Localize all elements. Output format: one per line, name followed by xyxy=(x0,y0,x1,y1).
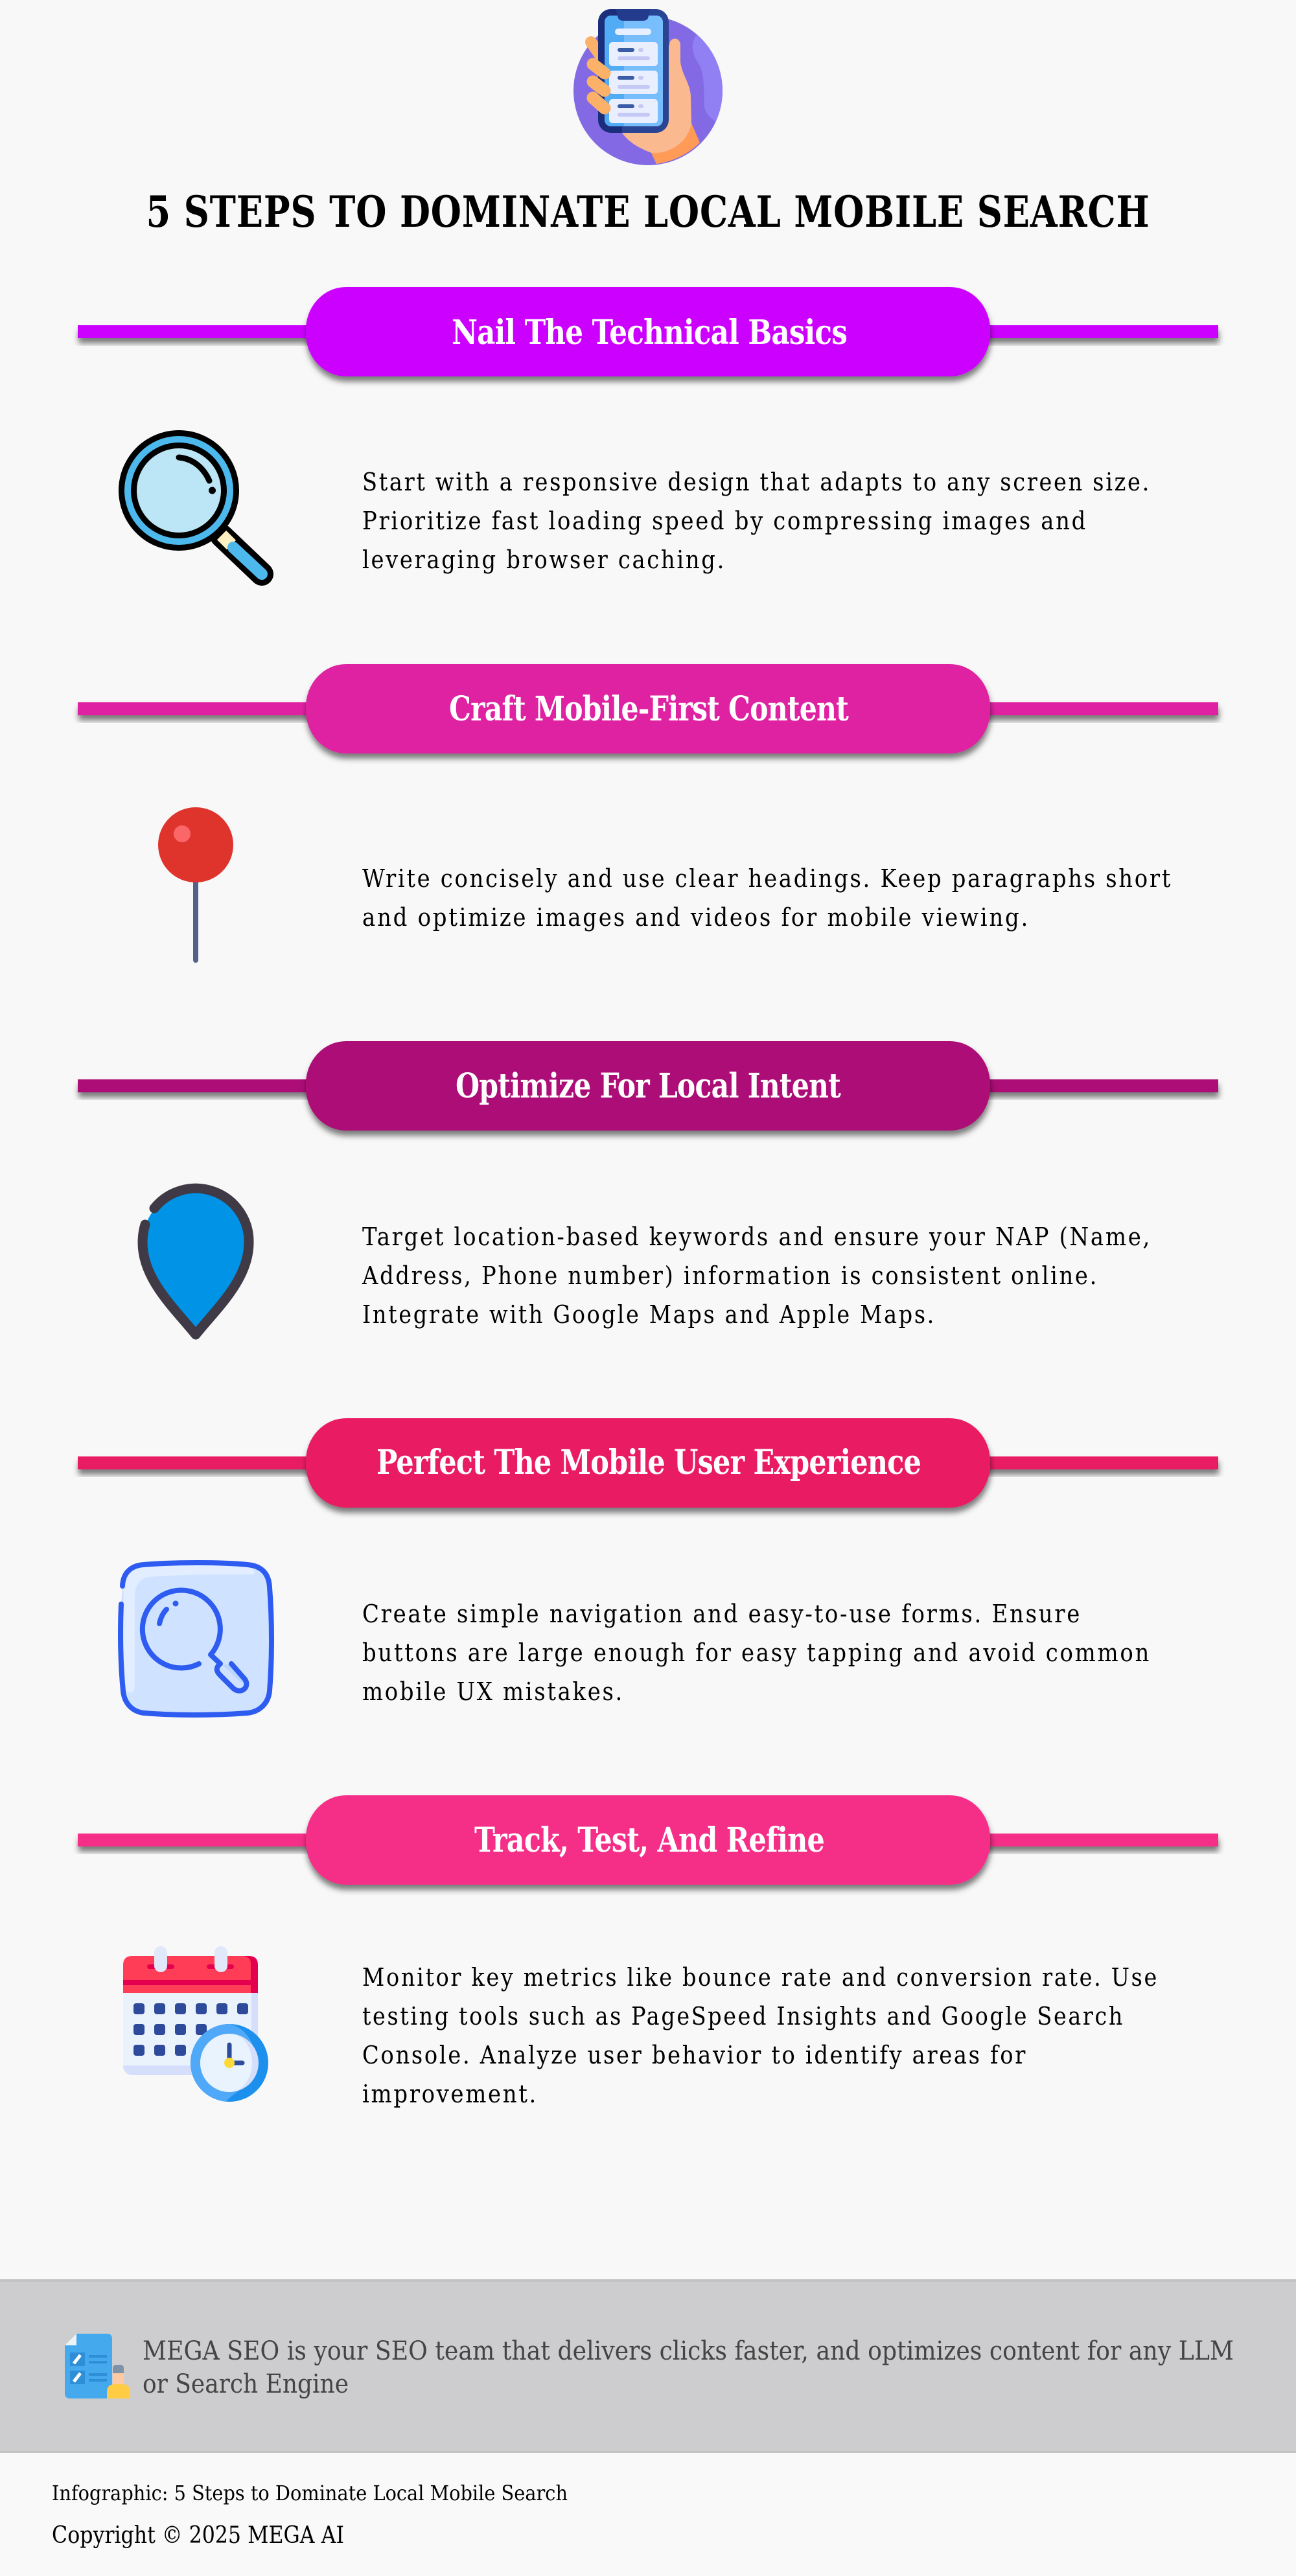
banner: Craft Mobile-First Content: Craft Mobile-First Content xyxy=(449,689,849,729)
text: step 3 description: Address, Phone number) information is consistent online. xyxy=(362,1261,1098,1290)
footer xyxy=(0,2453,1296,2576)
text: step 5 description xyxy=(362,1963,1159,2108)
banner: Perfect The Mobile User Experience: Perfect The Mobile User Experience xyxy=(376,1443,921,1482)
panel: step 1 xyxy=(78,287,1218,574)
text: step 3 description: Target location-based keywords and ensure your NAP (Name, xyxy=(362,1223,1151,1251)
banner: Craft Mobile-First Content xyxy=(78,664,1218,753)
text: step 2 description xyxy=(362,864,1172,932)
footer caption: Infographic: 5 Steps to Dominate Local Mobile Search xyxy=(52,2481,568,2505)
banner: Perfect The Mobile User Experience xyxy=(78,1418,1218,1508)
text: step 3 description xyxy=(362,1223,1151,1329)
text: MEGA SEO message: or Search Engine xyxy=(143,2369,349,2399)
banner: Track, Test, And Refine xyxy=(78,1795,1218,1885)
text: step 4 description xyxy=(362,1600,1151,1706)
icon: blue map marker xyxy=(143,1188,249,1335)
text: step 4 description: mobile UX mistakes. xyxy=(362,1677,624,1706)
banner: Optimize For Local Intent xyxy=(78,1041,1218,1131)
text: step 4 description: buttons are large enough for easy tapping and avoid common xyxy=(362,1639,1151,1667)
text: step 4 description: Create simple navigation and easy-to-use forms. Ensure xyxy=(362,1600,1082,1628)
icon: magnifying glass xyxy=(119,430,262,574)
icon: document with person xyxy=(65,2334,130,2398)
text: step 5 description: Console. Analyze user behavior to identify areas for xyxy=(362,2041,1027,2069)
panel: step 4 xyxy=(78,1418,1218,1715)
banner: Nail The Technical Basics xyxy=(78,287,1218,376)
text: step 5 description: improvement. xyxy=(362,2080,538,2108)
text: step 2 description: and optimize images and videos for mobile viewing. xyxy=(362,903,1030,932)
copyright: Copyright © 2025 MEGA AI xyxy=(52,2522,344,2549)
text: step 5 description: Monitor key metrics like bounce rate and conversion rate. Use xyxy=(362,1963,1159,1992)
text: step 2 description: Write concisely and use clear headings. Keep paragraphs short xyxy=(362,864,1172,893)
text: step 3 description: Integrate with Google Maps and Apple Maps. xyxy=(362,1300,936,1329)
text: step 5 description: testing tools such as PageSpeed Insights and Google Search xyxy=(362,2002,1124,2030)
text: MEGA SEO message xyxy=(143,2336,1234,2399)
banner: Nail The Technical Basics: Nail The Technical Basics xyxy=(452,313,847,352)
text: step 1 description xyxy=(362,468,1151,574)
panel: MEGA SEO callout band xyxy=(0,2279,1296,2453)
icon: magnifier in rounded square xyxy=(121,1563,272,1715)
icon: red push pin xyxy=(158,807,233,963)
banner: Track, Test, And Refine: Track, Test, And Refine xyxy=(474,1821,824,1860)
text: step 1 description: Prioritize fast loading speed by compressing images and xyxy=(362,507,1087,535)
panel: step 5 xyxy=(78,1795,1218,2108)
text: step 1 description: leveraging browser caching. xyxy=(362,546,726,574)
banner: Optimize For Local Intent: Optimize For Local Intent xyxy=(456,1066,841,1106)
panel: step 3 xyxy=(78,1041,1218,1335)
text: step 1 description: Start with a responsive design that adapts to any screen size. xyxy=(362,468,1151,496)
panel: step 2 xyxy=(78,664,1218,963)
icon: hand holding phone xyxy=(573,9,732,165)
icon: calendar with clock xyxy=(123,1946,268,2102)
